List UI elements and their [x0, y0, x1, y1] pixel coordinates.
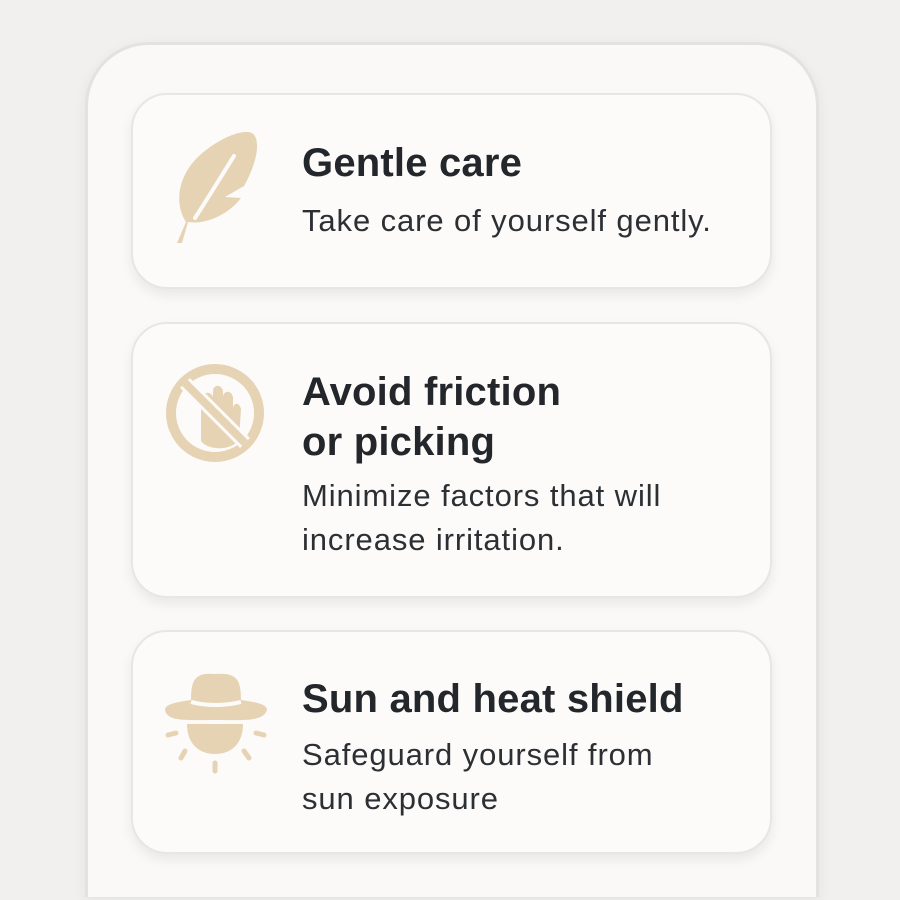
icon: feather — [177, 132, 257, 243]
panel: outer container — [85, 42, 819, 897]
text: avoid friction: Minimize factors that will — [302, 478, 661, 513]
icon: hat and sun — [165, 674, 267, 774]
text: sun and heat shield: Safeguard yourself from — [302, 737, 654, 772]
title: avoid friction: or picking — [302, 420, 495, 464]
title: sun and heat shield: Sun and heat shield — [302, 677, 684, 721]
card: gentle care — [131, 93, 772, 289]
card: sun and heat shield — [131, 630, 772, 854]
title: avoid friction — [302, 370, 561, 464]
title: avoid friction: Avoid friction — [302, 370, 561, 414]
icon: no hand — [166, 364, 264, 462]
title: gentle care: Gentle care — [302, 141, 522, 185]
card: avoid friction — [131, 322, 772, 598]
text: sun and heat shield — [302, 737, 654, 816]
text: avoid friction — [302, 478, 661, 557]
text: avoid friction: increase irritation. — [302, 522, 565, 557]
text: gentle care: Take care of yourself gently. — [302, 203, 712, 238]
text: sun and heat shield: sun exposure — [302, 781, 499, 816]
